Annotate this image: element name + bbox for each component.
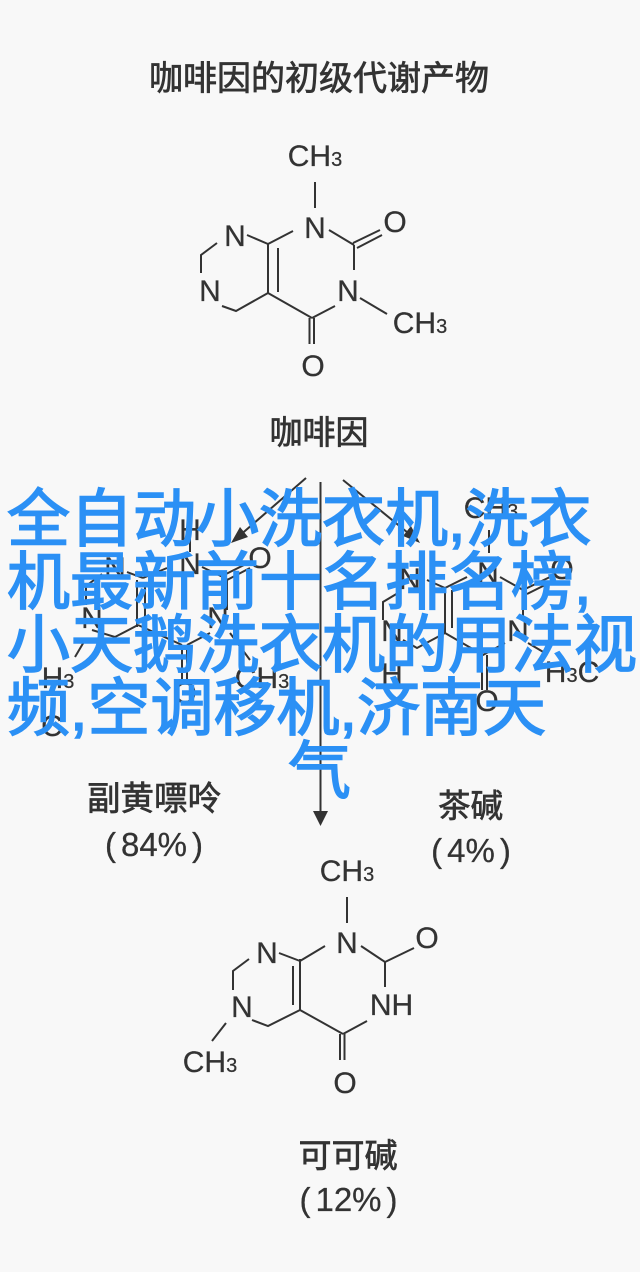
overlay headline: 气: [288, 737, 351, 807]
theophylline label: (4%): [431, 832, 511, 869]
theophylline bonds: [383, 530, 553, 690]
caffeine label: 咖啡因: [270, 414, 368, 451]
theobromine atom labels: O: [333, 1067, 357, 1100]
theophylline atom labels: N: [477, 557, 499, 590]
theophylline atom labels: O: [550, 553, 574, 586]
arrow: to theobromine: [313, 482, 328, 826]
theobromine atom labels: N: [231, 991, 253, 1024]
paraxanthine atom labels: N: [207, 602, 229, 635]
theobromine label: [298, 1137, 398, 1218]
molecule: theobromine: [183, 855, 439, 1100]
theophylline atom labels: N: [399, 563, 421, 596]
caffeine atom labels: [199, 140, 447, 383]
caffeine atom labels: CH3: [288, 140, 342, 173]
paraxanthine atom labels: C: [41, 710, 63, 743]
theobromine label: 可可碱: [298, 1137, 398, 1174]
overlay headline: 全自动小洗衣机,洗衣: [7, 485, 592, 555]
molecule: caffeine: [199, 140, 447, 383]
theobromine atom labels: [183, 855, 439, 1100]
paraxanthine atom labels: [41, 514, 289, 743]
paraxanthine atom labels: O: [248, 542, 272, 575]
paraxanthine atom labels: O: [173, 677, 197, 710]
caffeine atom labels: N: [304, 212, 326, 245]
theobromine atom labels: O: [415, 922, 439, 955]
paraxanthine atom labels: H: [179, 514, 201, 547]
caffeine atom labels: N: [199, 275, 221, 308]
arrow: to theophylline: [343, 480, 420, 543]
paraxanthine label: 副黄嘌呤: [87, 781, 221, 818]
overlay headline: 机最新前十名排名榜,: [7, 548, 592, 618]
caffeine atom labels: CH3: [393, 307, 447, 340]
paraxanthine atom labels: N: [104, 552, 126, 585]
paraxanthine label: [87, 781, 221, 863]
theophylline atom labels: N: [381, 615, 403, 648]
paraxanthine atom labels: CH3: [235, 662, 289, 695]
theobromine atom labels: N: [256, 937, 278, 970]
paraxanthine atom labels: N: [81, 602, 103, 635]
paraxanthine atom labels: H3: [42, 662, 74, 695]
caffeine bonds: [201, 182, 387, 344]
theophylline atom labels: H3C: [545, 656, 599, 689]
overlay headline: 频,空调移机,济南天: [7, 674, 546, 744]
theophylline label: 茶碱: [438, 788, 503, 824]
paraxanthine bonds: [75, 512, 250, 680]
theophylline atom labels: O: [475, 685, 499, 718]
theobromine atom labels: CH3: [183, 1046, 237, 1079]
paraxanthine label: (84%): [105, 826, 203, 863]
overlay headline: [7, 485, 637, 807]
caffeine atom labels: N: [337, 275, 359, 308]
theophylline atom labels: CH3: [464, 492, 518, 525]
molecule: paraxanthine: [41, 512, 289, 743]
theobromine atom labels: NH: [370, 989, 413, 1022]
theobromine atom labels: N: [336, 927, 358, 960]
paraxanthine atom labels: N: [179, 548, 201, 581]
caffeine atom labels: O: [301, 350, 325, 383]
title: 咖啡因的初级代谢产物: [149, 60, 489, 98]
caffeine atom labels: N: [224, 220, 246, 253]
caffeine atom labels: O: [383, 206, 407, 239]
molecule: theophylline: [381, 492, 599, 718]
arrow: to paraxanthine: [231, 478, 306, 543]
theobromine atom labels: CH3: [320, 855, 374, 888]
theophylline atom labels: [381, 492, 599, 718]
theophylline atom labels: H: [381, 658, 403, 691]
overlay headline: 小天鹅洗衣机的用法视: [7, 611, 637, 681]
theobromine bonds: [212, 897, 414, 1060]
theophylline atom labels: N: [507, 615, 529, 648]
theobromine label: (12%): [299, 1181, 398, 1218]
theophylline label: [431, 788, 511, 869]
